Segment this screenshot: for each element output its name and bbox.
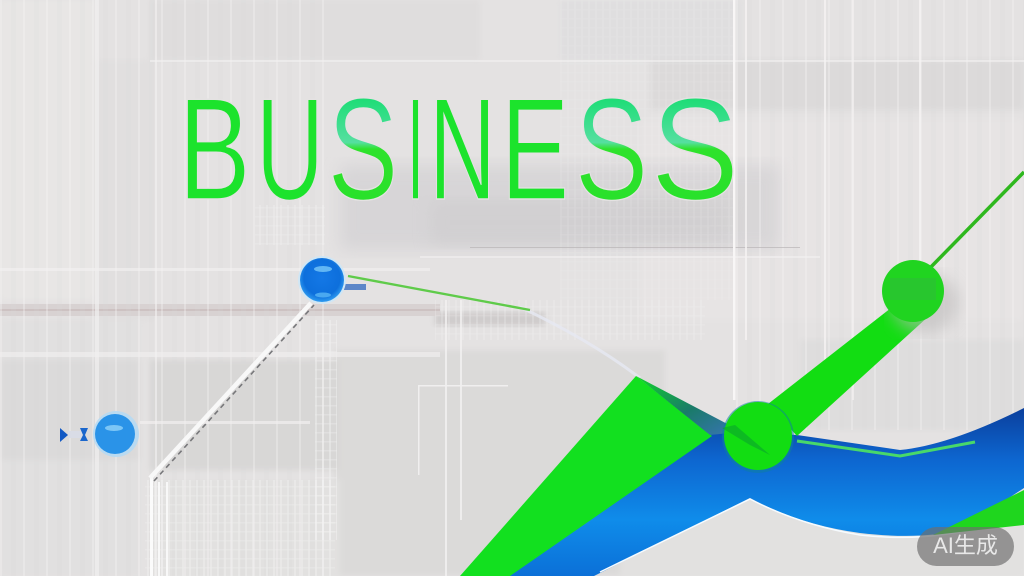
node: small blue ball	[93, 411, 139, 457]
white dashed connector line	[150, 303, 314, 481]
chart line: thin green upper segment	[928, 172, 1024, 270]
title: BUSINESS: B	[178, 68, 250, 230]
badge: AI生成	[917, 527, 1014, 566]
arrow: small blue marker	[60, 428, 88, 442]
chart ribbon: green left segment	[460, 376, 740, 576]
title: BUSINESS: S	[575, 68, 648, 230]
title: BUSINESS: S	[328, 68, 398, 230]
green connector line	[344, 276, 640, 378]
chart ribbon: green lower right segment	[933, 490, 1024, 535]
title: BUSINESS: I	[407, 68, 424, 230]
chart ribbon: blue band	[500, 408, 1024, 576]
title: BUSINESS: E	[501, 68, 569, 230]
title: BUSINESS	[178, 68, 739, 230]
badge: AI生成: AI生成	[933, 533, 998, 558]
title: BUSINESS: S	[651, 68, 739, 230]
title: BUSINESS: N	[429, 68, 496, 230]
node: upper green circle	[882, 260, 959, 333]
title: BUSINESS: U	[256, 68, 324, 230]
node: green circle on ribbon	[722, 401, 794, 473]
chart arrow: green rising segment	[768, 304, 930, 436]
node: large blue ball	[298, 256, 346, 304]
